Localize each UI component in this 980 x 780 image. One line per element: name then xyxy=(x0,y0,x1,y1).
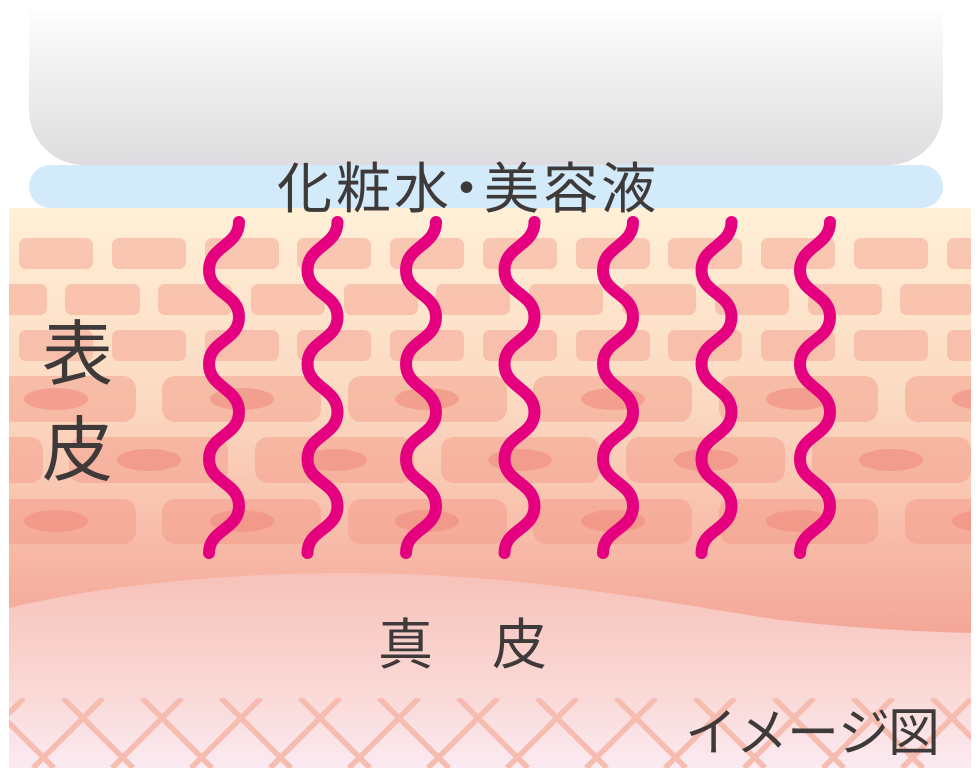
label: epidermis bottom character: 皮 xyxy=(42,412,113,491)
penetration waves xyxy=(209,222,830,553)
epidermis background xyxy=(9,208,971,633)
heading: lotion and serum: 化粧水・美容液 xyxy=(277,158,656,220)
lotion layer xyxy=(29,165,943,208)
dermis xyxy=(9,573,971,768)
cell nuclei xyxy=(24,388,980,532)
label: dermis: 真皮 xyxy=(378,614,547,676)
upper epidermis cells xyxy=(0,238,980,361)
applicator pad xyxy=(29,11,943,165)
lower epidermis cells xyxy=(0,376,980,544)
label: epidermis top character: 表 xyxy=(42,316,113,395)
collagen lattice xyxy=(0,698,980,768)
panel: skin cross-section xyxy=(0,208,980,768)
label: image diagram: イメージ図 xyxy=(685,705,940,763)
